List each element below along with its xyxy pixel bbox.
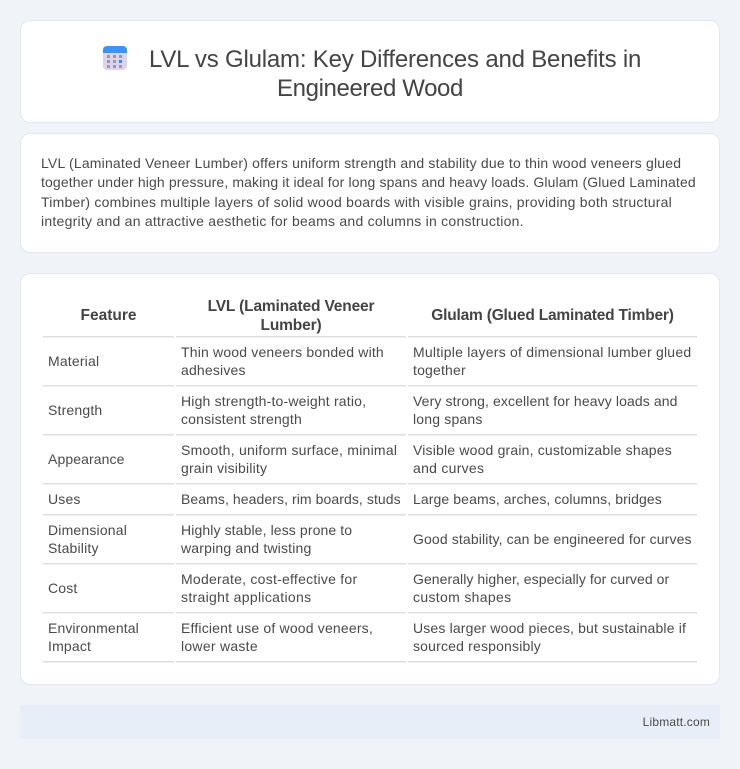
table header: LVL (Laminated Veneer <box>208 298 374 315</box>
row: Environmental Impact: Efficient use of wood veneers, <box>181 620 373 636</box>
row: Cost: straight applications <box>181 589 311 605</box>
row: Appearance: and curves <box>413 460 484 476</box>
intro paragraph: integrity and an attractive aesthetic for beams and columns in construction. <box>41 213 524 229</box>
intro paragraph: Timber) combines multiple layers of solid wood boards with visible grains, providing both structural <box>41 194 672 210</box>
row: Environmental Impact: Impact <box>48 638 91 654</box>
row: Dimensional Stability: warping and twisting <box>181 540 311 556</box>
row: Cost: custom shapes <box>413 589 511 605</box>
row: Dimensional Stability: Stability <box>48 540 99 556</box>
row: Cost: Generally higher, especially for curved or <box>413 571 669 587</box>
row: Strength: Very strong, excellent for heavy loads and <box>413 393 678 409</box>
table header: Feature <box>80 307 136 324</box>
table header: Glulam (Glued Laminated Timber) <box>431 307 674 324</box>
row: Strength: Strength <box>48 402 102 418</box>
row: Cost <box>48 571 669 605</box>
row: Cost: Cost <box>48 580 78 596</box>
table header: Lumber) <box>261 317 321 334</box>
row: Cost: Moderate, cost-effective for <box>181 571 357 587</box>
row: Uses <box>48 491 662 507</box>
row: Environmental Impact: sourced responsibly <box>413 638 541 654</box>
panel: intro text <box>20 133 720 253</box>
footer bar <box>20 705 720 739</box>
row: Strength: consistent strength <box>181 411 302 427</box>
row: Dimensional Stability: Dimensional <box>48 522 127 538</box>
panel: comparison table <box>20 273 720 685</box>
row: Appearance: grain visibility <box>181 460 267 476</box>
table header <box>80 298 674 334</box>
icon: calendar <box>103 46 127 70</box>
row: Appearance: Visible wood grain, customizable shapes <box>413 442 672 458</box>
title: Engineered Wood <box>277 75 463 102</box>
row: Environmental Impact: Uses larger wood pieces, but sustainable if <box>413 620 686 636</box>
row: Material: adhesives <box>181 362 246 378</box>
title: LVL vs Glulam: Key Differences and Benefits in <box>149 46 641 73</box>
row: Uses: Beams, headers, rim boards, studs <box>181 491 401 507</box>
row: Material: together <box>413 362 466 378</box>
row: Material <box>48 344 691 378</box>
intro paragraph: together under high pressure, making it ideal for long spans and heavy loads. Glulam (Glued Laminated <box>41 174 696 190</box>
row: Dimensional Stability: Good stability, can be engineered for curves <box>413 531 692 547</box>
intro paragraph <box>41 155 696 229</box>
row: Material: Thin wood veneers bonded with <box>181 344 384 360</box>
row: Dimensional Stability <box>48 522 692 556</box>
row: Material: Material <box>48 353 99 369</box>
row: Environmental Impact: lower waste <box>181 638 258 654</box>
panel: title card <box>20 20 720 123</box>
table <box>43 298 697 663</box>
footer credit: Libmatt.com <box>643 715 710 729</box>
row: Strength: High strength-to-weight ratio, <box>181 393 366 409</box>
row: Environmental Impact: Environmental <box>48 620 139 636</box>
row: Uses: Uses <box>48 491 81 507</box>
row: Appearance <box>48 442 672 476</box>
row: Dimensional Stability: Highly stable, less prone to <box>181 522 352 538</box>
row: Strength: long spans <box>413 411 483 427</box>
title <box>149 46 641 102</box>
row: Appearance: Smooth, uniform surface, minimal <box>181 442 397 458</box>
row: Appearance: Appearance <box>48 451 125 467</box>
row: Environmental Impact <box>48 620 686 654</box>
row: Strength <box>48 393 678 427</box>
intro paragraph: LVL (Laminated Veneer Lumber) offers uniform strength and stability due to thin wood veneers glued <box>41 155 681 171</box>
row: Uses: Large beams, arches, columns, bridges <box>413 491 662 507</box>
row: Material: Multiple layers of dimensional lumber glued <box>413 344 691 360</box>
